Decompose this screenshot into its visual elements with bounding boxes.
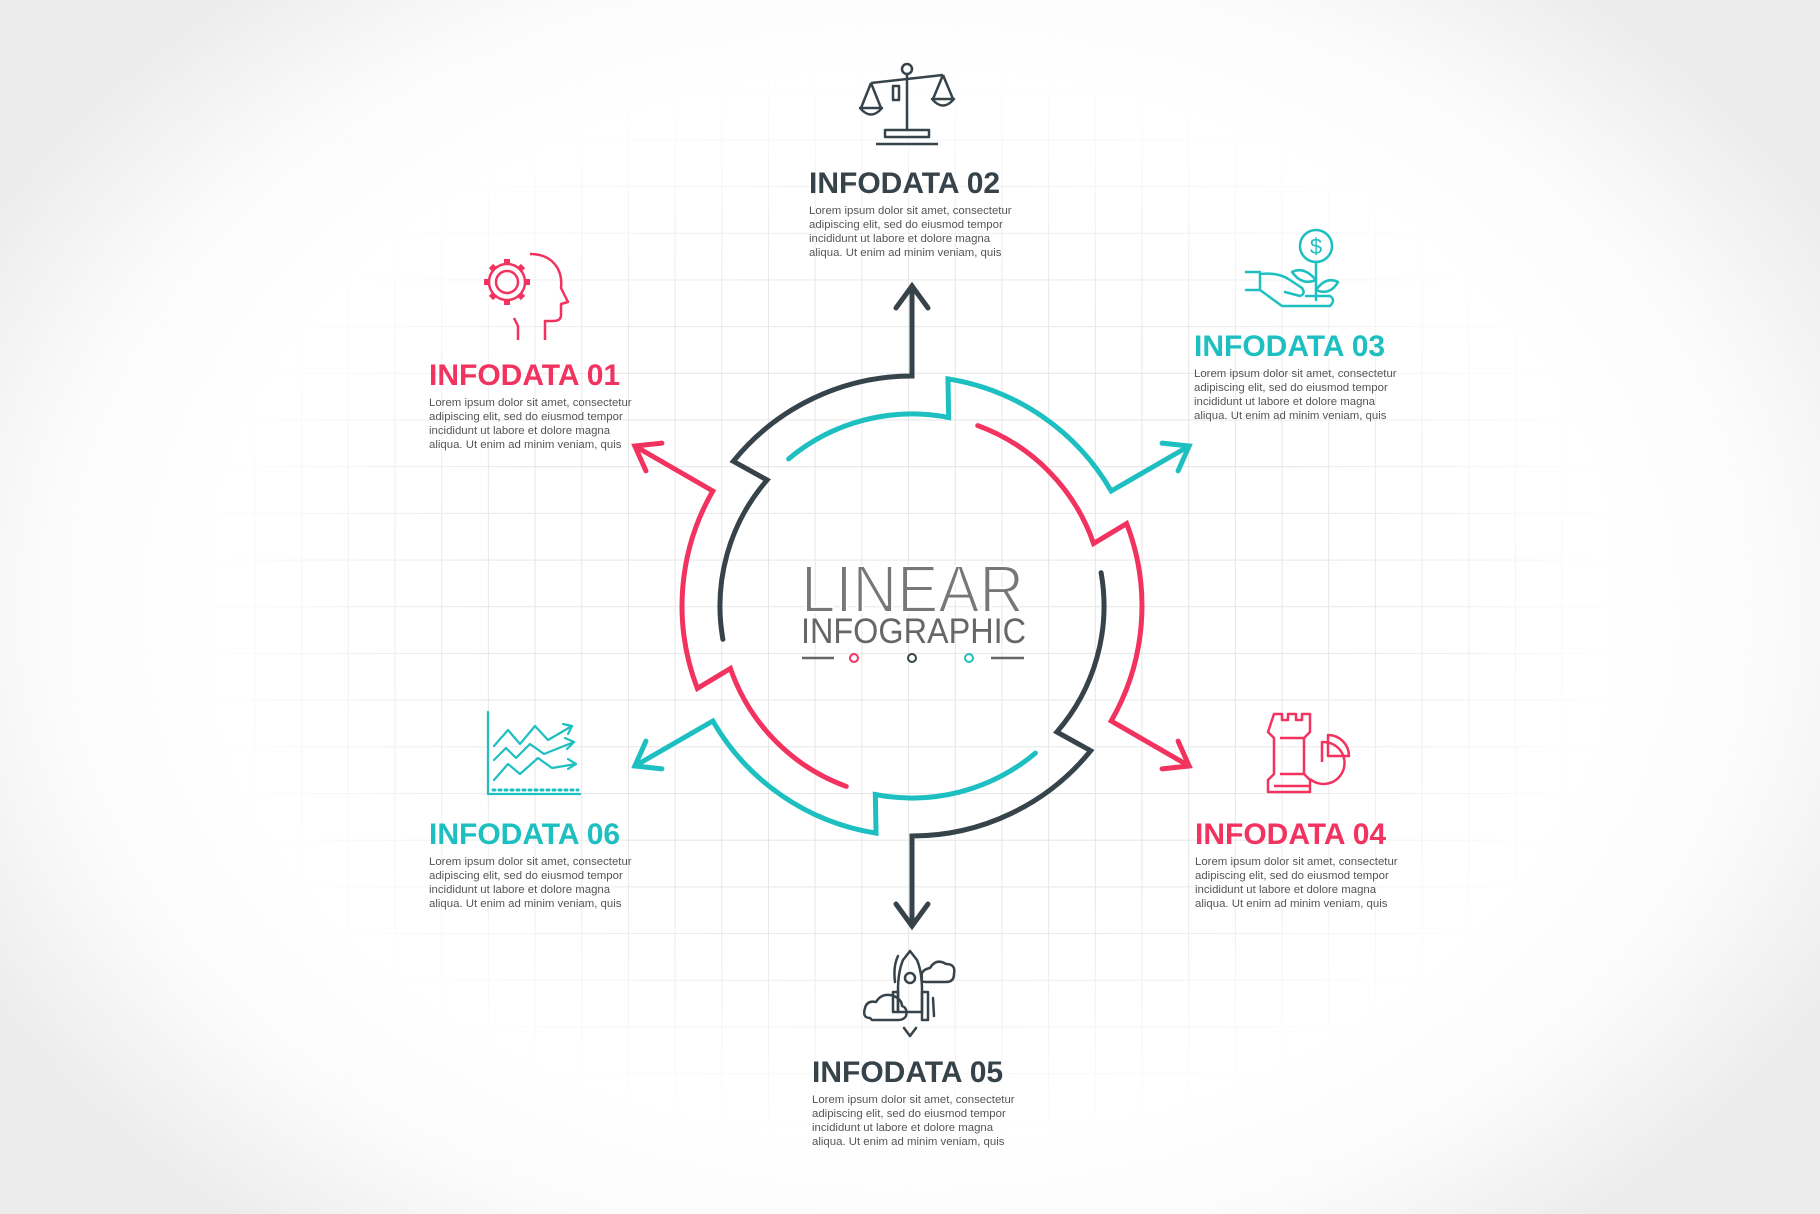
- text: infodata 03: Lorem ipsum dolor sit amet, consectetur: [1194, 368, 1397, 380]
- ring: pink segments: [539, 423, 1285, 789]
- text: infodata 04: aliqua. Ut enim ad minim veniam, quis: [1195, 898, 1387, 910]
- text: infodata 03: adipiscing elit, sed do eiusmod tempor: [1194, 382, 1388, 394]
- text: infodata 02: Lorem ipsum dolor sit amet, consectetur: [809, 205, 1012, 217]
- heading: infodata 03: INFODATA 03: [1194, 330, 1385, 363]
- text: infodata 01: Lorem ipsum dolor sit amet, consectetur: [429, 397, 632, 409]
- text: infodata 01: [429, 397, 632, 451]
- ring: dark segments: [720, 286, 1104, 926]
- center title: [801, 552, 1026, 662]
- text: infodata 06: Lorem ipsum dolor sit amet, consectetur: [429, 856, 632, 868]
- text: infodata 06: adipiscing elit, sed do eiusmod tempor: [429, 870, 623, 882]
- text: infodata 01: aliqua. Ut enim ad minim veniam, quis: [429, 439, 621, 451]
- center title: INFOGRAPHIC: [801, 612, 1026, 651]
- text: infodata 03: [1194, 368, 1397, 422]
- text: infodata 04: [1195, 856, 1398, 910]
- heading: infodata 01: INFODATA 01: [429, 359, 620, 392]
- text: infodata 02: incididunt ut labore et dolore magna: [809, 233, 990, 245]
- text: infodata 04: incididunt ut labore et dolore magna: [1195, 884, 1376, 896]
- icon: chess rook and pie: [1268, 714, 1349, 792]
- icon: hand with money plant: [1246, 230, 1338, 306]
- text: infodata 05: adipiscing elit, sed do eiusmod tempor: [812, 1108, 1006, 1120]
- text: infodata 01: incididunt ut labore et dolore magna: [429, 425, 610, 437]
- text: infodata 03: incididunt ut labore et dolore magna: [1194, 396, 1375, 408]
- text: infodata 04: adipiscing elit, sed do eiusmod tempor: [1195, 870, 1389, 882]
- text: infodata 02: adipiscing elit, sed do eiusmod tempor: [809, 219, 1003, 231]
- icon: head with gear: [484, 254, 568, 340]
- text: infodata 05: aliqua. Ut enim ad minim veniam, quis: [812, 1136, 1004, 1148]
- heading: infodata 04: INFODATA 04: [1195, 818, 1386, 851]
- text: infodata 06: aliqua. Ut enim ad minim veniam, quis: [429, 898, 621, 910]
- text: infodata 02: [809, 205, 1012, 259]
- icon: rocket with clouds: [864, 951, 954, 1036]
- heading: infodata 05: INFODATA 05: [812, 1056, 1003, 1089]
- text: infodata 03: aliqua. Ut enim ad minim veniam, quis: [1194, 410, 1386, 422]
- icon: hand with money plant: $: [1310, 234, 1322, 259]
- ring: teal segments: [627, 280, 1197, 932]
- text: infodata 06: [429, 856, 632, 910]
- heading: infodata 02: INFODATA 02: [809, 167, 1000, 200]
- center title: LINEAR: [801, 552, 1024, 627]
- text: infodata 05: [812, 1094, 1015, 1148]
- text: infodata 04: Lorem ipsum dolor sit amet, consectetur: [1195, 856, 1398, 868]
- icon: growth chart: [488, 712, 580, 794]
- text: infodata 05: Lorem ipsum dolor sit amet, consectetur: [812, 1094, 1015, 1106]
- text: infodata 02: aliqua. Ut enim ad minim veniam, quis: [809, 247, 1001, 259]
- heading: infodata 06: INFODATA 06: [429, 818, 620, 851]
- text: infodata 01: adipiscing elit, sed do eiusmod tempor: [429, 411, 623, 423]
- text: infodata 06: incididunt ut labore et dolore magna: [429, 884, 610, 896]
- icon: scales: [860, 64, 954, 144]
- text: infodata 05: incididunt ut labore et dolore magna: [812, 1122, 993, 1134]
